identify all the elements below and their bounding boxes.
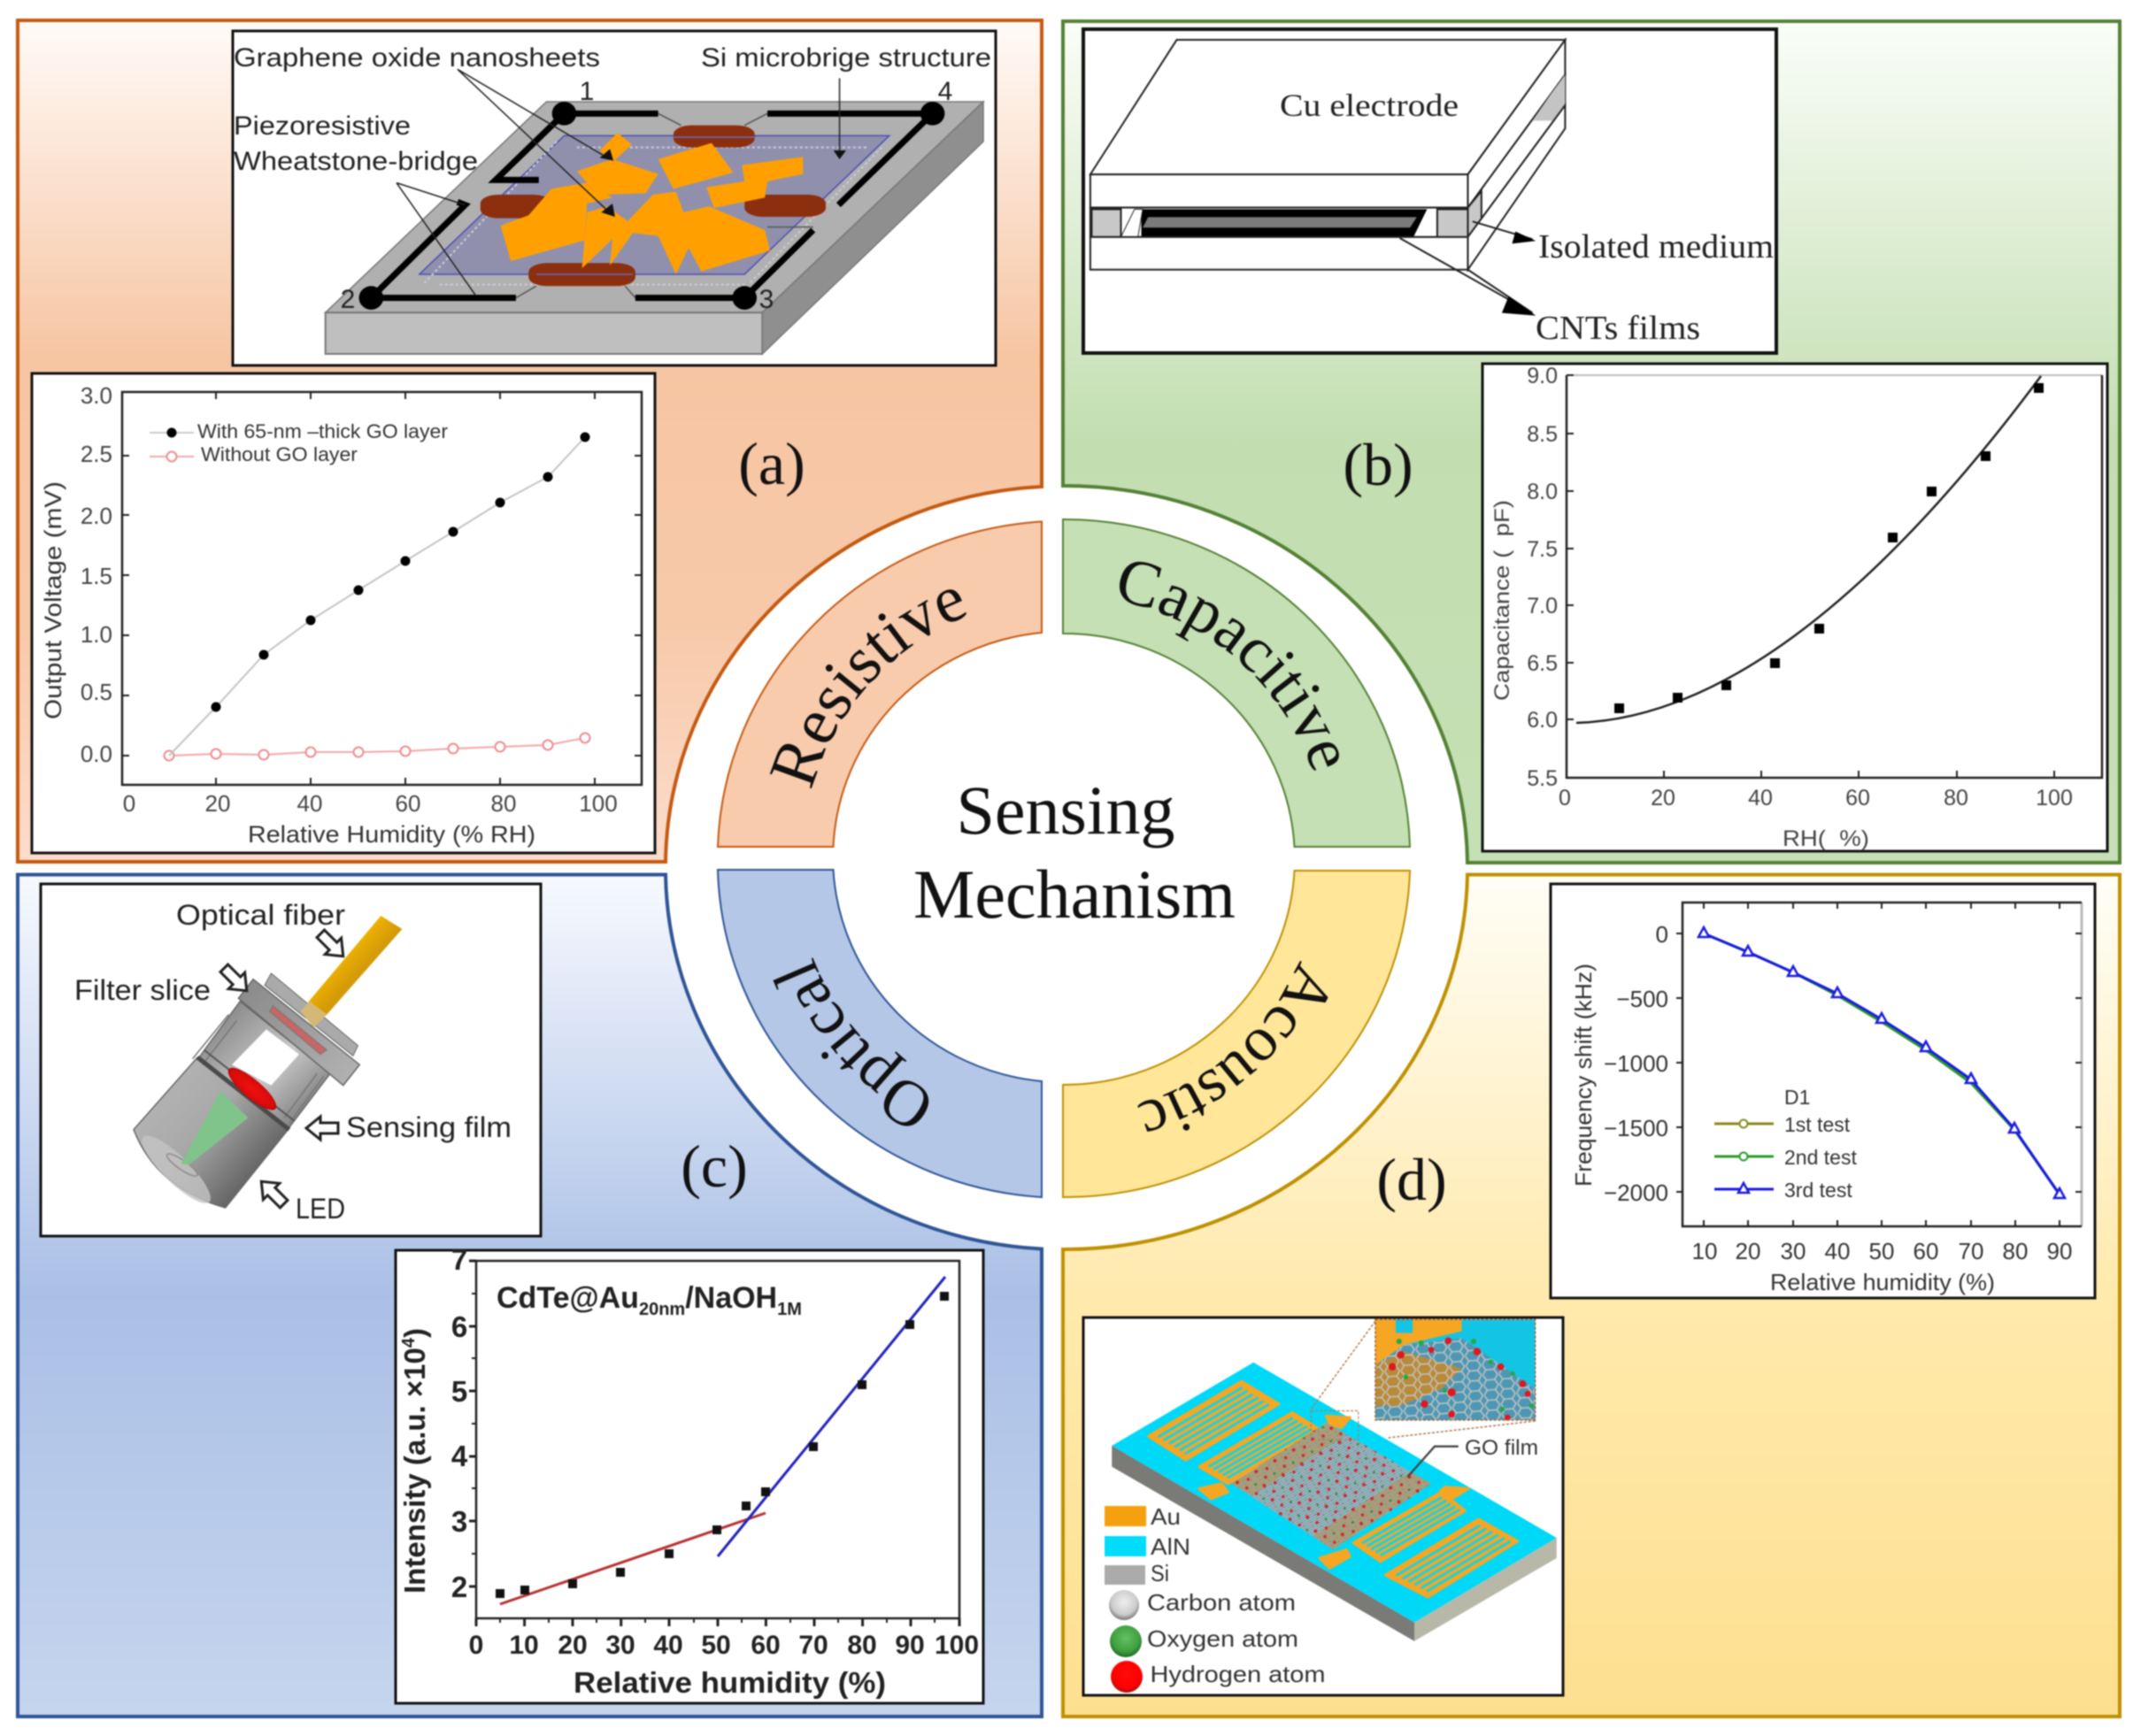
legend: materials and atoms: Si bbox=[1151, 1560, 1169, 1586]
legend: materials and atoms: Au bbox=[1151, 1503, 1181, 1530]
chart c: intensity vs relative humidity bbox=[396, 1243, 983, 1703]
data points bbox=[496, 1292, 949, 1598]
chart b: capacitance vs RH bbox=[1482, 364, 2107, 851]
x ticks: 40 bbox=[1825, 1238, 1850, 1264]
x ticks: 80 bbox=[491, 790, 516, 817]
x axis title: Relative humidity (%) bbox=[1770, 1269, 1995, 1295]
legend: 1st test bbox=[1784, 1113, 1851, 1136]
y ticks: 4 bbox=[451, 1440, 468, 1472]
terminal numbers: 4 bbox=[938, 77, 952, 106]
terminal numbers: 1 bbox=[580, 77, 594, 106]
diagram a: Wheatstone-bridge microbridge bbox=[233, 31, 996, 365]
chart a: output voltage vs relative humidity bbox=[32, 373, 655, 853]
y ticks: 0.5 bbox=[81, 679, 112, 705]
legend: materials and atoms: Oxygen atom bbox=[1147, 1625, 1298, 1652]
x ticks: 60 bbox=[1845, 786, 1870, 810]
x ticks: 70 bbox=[1959, 1238, 1983, 1264]
x ticks bbox=[469, 1631, 979, 1660]
panel a: resistive background bbox=[18, 20, 1042, 862]
y ticks: 7.5 bbox=[1527, 537, 1558, 562]
y axis title: 4 bbox=[399, 1337, 419, 1348]
fit line: low humidity bbox=[500, 1513, 766, 1604]
inset formula: 20nm bbox=[639, 1300, 685, 1319]
device slab, electrodes and GO film bbox=[1112, 1321, 1557, 1641]
center title: Mechanism bbox=[913, 856, 1236, 933]
y axis title: Capacitance ( pF) bbox=[1490, 500, 1514, 701]
axes bbox=[1676, 903, 2082, 1226]
center ring: band Capacitive bbox=[1061, 518, 1412, 849]
legend: materials and atoms: AlN bbox=[1151, 1533, 1190, 1560]
axes bbox=[1567, 375, 2102, 778]
y axis title: Intensity (a.u. ×10 bbox=[398, 1348, 431, 1594]
terminal numbers: 2 bbox=[341, 285, 355, 314]
axes bbox=[469, 1261, 959, 1626]
y ticks: 2 bbox=[451, 1571, 467, 1603]
label: piezoresistive wheatstone-bridge: Wheatstone-bridge bbox=[234, 147, 478, 176]
x ticks: 30 bbox=[1781, 1238, 1806, 1264]
arrow: filter slice bbox=[216, 960, 255, 999]
center ring: band Resistive: Resistive bbox=[769, 588, 967, 789]
x ticks: 0 bbox=[123, 790, 135, 817]
y axis title: Output Voltage (mV) bbox=[40, 481, 66, 719]
silicon block drawing bbox=[326, 69, 983, 354]
x ticks: 50 bbox=[701, 1631, 731, 1660]
x ticks bbox=[123, 790, 618, 817]
x ticks bbox=[1559, 786, 2073, 810]
chart d: frequency shift vs relative humidity bbox=[1551, 884, 2095, 1298]
x ticks: 60 bbox=[751, 1631, 781, 1660]
y ticks bbox=[451, 1243, 468, 1603]
y ticks bbox=[81, 382, 112, 767]
label: CNTs films: CNTs films bbox=[1536, 310, 1700, 347]
legend: materials and atoms: Hydrogen atom bbox=[1151, 1661, 1326, 1687]
label: optical fiber: Optical fiber bbox=[176, 899, 345, 931]
y ticks: 1.0 bbox=[81, 621, 112, 648]
y ticks: −2000 bbox=[1604, 1179, 1668, 1206]
legend bbox=[150, 420, 448, 465]
inset formula: 1M bbox=[777, 1300, 802, 1319]
y ticks: 7 bbox=[451, 1243, 467, 1276]
series: with 65-nm GO layer bbox=[169, 432, 589, 756]
diagram c: optical fiber sensor device bbox=[41, 884, 541, 1236]
capacitor layers bbox=[1090, 40, 1565, 316]
y ticks: 0 bbox=[1656, 921, 1668, 948]
fit curve bbox=[1576, 376, 2041, 723]
series: 1st and 2nd test bbox=[1704, 933, 2060, 1194]
legend bbox=[1714, 1086, 1857, 1202]
y ticks: 8.0 bbox=[1527, 480, 1558, 504]
arrow: optical fiber bbox=[312, 926, 351, 964]
x ticks: 70 bbox=[798, 1631, 828, 1660]
x ticks: 100 bbox=[935, 1631, 979, 1660]
fit line: high humidity bbox=[718, 1277, 945, 1556]
x ticks: 80 bbox=[1944, 786, 1968, 810]
label (c): (c) bbox=[681, 1133, 748, 1200]
panel d: acoustic background bbox=[1063, 874, 2120, 1717]
x ticks: 80 bbox=[847, 1631, 877, 1660]
label: filter slice: Filter slice bbox=[74, 974, 211, 1006]
x ticks: 20 bbox=[205, 790, 230, 817]
label: piezoresistive wheatstone-bridge bbox=[234, 111, 478, 176]
arrow: sensing film bbox=[306, 1117, 338, 1140]
center title bbox=[913, 772, 1236, 933]
inset formula: /NaOH bbox=[685, 1281, 777, 1315]
legend: With 65-nm –thick GO layer bbox=[197, 420, 448, 442]
y ticks: 6.5 bbox=[1527, 651, 1558, 676]
label (a): (a) bbox=[738, 430, 805, 497]
legend: 2nd test bbox=[1784, 1146, 1857, 1169]
y ticks: 6.0 bbox=[1527, 708, 1558, 733]
device drawing bbox=[133, 916, 402, 1210]
y ticks: 1.5 bbox=[81, 563, 112, 589]
y ticks: 3 bbox=[451, 1505, 467, 1538]
panel c: optical background bbox=[18, 874, 1042, 1717]
label: Isolated medium: Isolated medium bbox=[1538, 228, 1774, 265]
center ring: band Capacitive: Capacitive bbox=[1119, 561, 1340, 772]
x ticks: 30 bbox=[605, 1631, 635, 1660]
x ticks: 40 bbox=[653, 1631, 683, 1660]
label (d): (d) bbox=[1376, 1146, 1447, 1213]
center ring: band Resistive bbox=[716, 519, 1043, 849]
label: Si microbridge structure: Si microbrige structure bbox=[701, 43, 991, 73]
label: piezoresistive wheatstone-bridge: Piezoresistive bbox=[234, 111, 411, 141]
x ticks: 60 bbox=[396, 790, 420, 817]
y ticks: 6 bbox=[451, 1310, 467, 1343]
y axis title: ) bbox=[398, 1328, 431, 1338]
y ticks: 2.5 bbox=[81, 441, 112, 467]
y ticks: 8.5 bbox=[1527, 422, 1558, 447]
legend: Without GO layer bbox=[201, 443, 358, 465]
diagram b: parallel plate capacitor bbox=[1083, 29, 1776, 353]
y ticks bbox=[1604, 921, 1668, 1206]
x ticks: 60 bbox=[1914, 1238, 1938, 1264]
y ticks: 9.0 bbox=[1527, 364, 1558, 388]
y ticks: −1500 bbox=[1604, 1115, 1668, 1141]
inset formula: CdTe@Au bbox=[497, 1281, 639, 1315]
x axis title: Relative humidity (%) bbox=[574, 1666, 886, 1699]
y ticks: 7.0 bbox=[1527, 594, 1558, 618]
x ticks bbox=[1692, 1238, 2072, 1264]
y ticks bbox=[1527, 364, 1558, 791]
series: 3rd test bbox=[1698, 927, 2065, 1198]
series: without GO layer bbox=[165, 733, 589, 761]
axes frame and ticks bbox=[122, 392, 642, 785]
center ring: band Acoustic: Acoustic bbox=[1136, 960, 1329, 1133]
center ring: band Acoustic bbox=[1060, 869, 1413, 1200]
y ticks: 2.0 bbox=[81, 503, 112, 529]
data points bbox=[1614, 383, 2044, 713]
x ticks: 0 bbox=[469, 1631, 483, 1660]
panel b: capacitive background bbox=[1063, 21, 2120, 863]
x ticks: 20 bbox=[558, 1631, 588, 1660]
label (b): (b) bbox=[1343, 431, 1413, 498]
x ticks: 10 bbox=[1692, 1238, 1717, 1264]
x axis title: Relative Humidity (% RH) bbox=[248, 821, 535, 848]
x ticks: 40 bbox=[1748, 786, 1773, 810]
label: GO film: GO film bbox=[1465, 1436, 1538, 1460]
terminal numbers: 3 bbox=[759, 285, 774, 314]
zoomed lattice inset bbox=[1375, 1319, 1536, 1421]
y axis title: Frequency shift (kHz) bbox=[1570, 964, 1597, 1187]
arrow: LED bbox=[253, 1173, 292, 1212]
label: sensing film: Sensing film bbox=[346, 1111, 512, 1143]
y ticks: −1000 bbox=[1604, 1050, 1668, 1077]
center ring: band Optical: Optical bbox=[772, 957, 929, 1127]
x ticks: 90 bbox=[2047, 1238, 2072, 1264]
y ticks: 0.0 bbox=[81, 741, 112, 767]
legend: 3rd test bbox=[1784, 1179, 1852, 1202]
x ticks: 20 bbox=[1736, 1238, 1760, 1264]
y ticks: 3.0 bbox=[81, 382, 112, 409]
diagram d: SAW device with GO film bbox=[1083, 1317, 1563, 1695]
x ticks: 40 bbox=[297, 790, 322, 817]
x ticks: 100 bbox=[2036, 786, 2073, 810]
legend: D1 bbox=[1784, 1086, 1810, 1109]
center title: Sensing bbox=[956, 772, 1175, 849]
legend: materials and atoms bbox=[1105, 1503, 1326, 1693]
label: LED: LED bbox=[296, 1193, 345, 1225]
label: Cu electrode: Cu electrode bbox=[1280, 88, 1459, 123]
terminal numbers bbox=[341, 77, 952, 314]
center ring: band Optical bbox=[716, 868, 1043, 1199]
x ticks: 0 bbox=[1559, 786, 1571, 810]
legend: materials and atoms: Carbon atom bbox=[1147, 1589, 1296, 1616]
y ticks: −500 bbox=[1616, 986, 1668, 1012]
x ticks: 10 bbox=[509, 1631, 539, 1660]
y ticks: 5 bbox=[451, 1375, 467, 1408]
label: graphene oxide nanosheets: Graphene oxide nanosheets bbox=[234, 43, 600, 73]
y ticks: 5.5 bbox=[1527, 766, 1558, 791]
x axis title: RH( %) bbox=[1783, 826, 1869, 851]
x ticks: 90 bbox=[895, 1631, 925, 1660]
x ticks: 80 bbox=[2003, 1238, 2028, 1264]
x ticks: 20 bbox=[1651, 786, 1675, 810]
x ticks: 100 bbox=[579, 790, 618, 817]
x ticks: 50 bbox=[1869, 1238, 1894, 1264]
